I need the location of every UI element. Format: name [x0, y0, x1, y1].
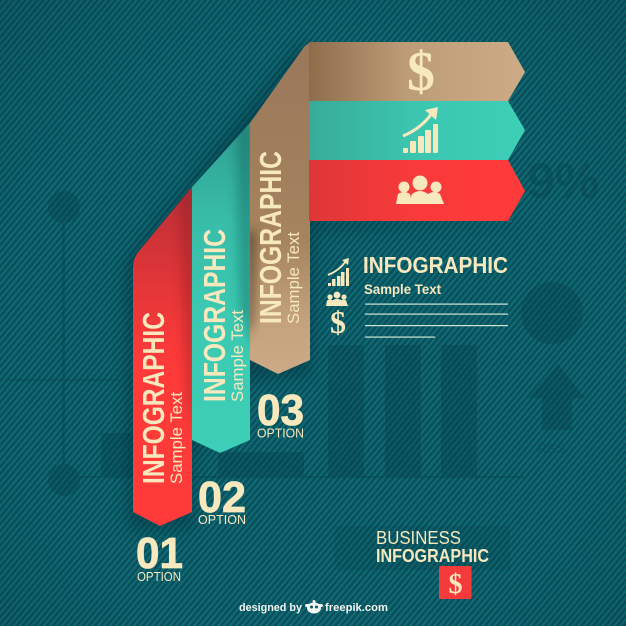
- text block: infographic heading: INFOGRAPHIC: [363, 252, 508, 278]
- panel: teal band with growth chart: [309, 101, 525, 160]
- icon: small people: [326, 292, 348, 306]
- ghost shadow behind business title: [335, 526, 510, 570]
- icon: small growth chart: [328, 258, 349, 286]
- teal ribbon sample text: Sample Text: [229, 310, 247, 402]
- teal ribbon heading: INFOGRAPHIC: [197, 229, 232, 402]
- text block: business infographic title: INFOGRAPHIC: [376, 546, 489, 566]
- red ribbon heading: INFOGRAPHIC: [136, 312, 171, 484]
- panel: teal ribbon vertical: [192, 123, 254, 453]
- red ribbon sample text: Sample Text: [168, 392, 186, 484]
- text lines: [365, 304, 508, 338]
- brown ribbon heading: INFOGRAPHIC: [253, 151, 288, 324]
- option 03: OPTION: [257, 426, 304, 440]
- icon: dollar: $: [407, 41, 435, 103]
- icon: small dollar: $: [330, 304, 346, 340]
- panel: brown band with dollar: [309, 41, 525, 103]
- option 01: 01: [136, 529, 183, 578]
- ghost background chart: RSS: [537, 440, 566, 456]
- footer credit: designed by: [239, 602, 303, 614]
- ribbon shadows: [125, 38, 525, 530]
- icon: growth chart: [403, 107, 438, 153]
- icon: freepik logo: [305, 600, 323, 614]
- panel: red ribbon vertical: [133, 187, 196, 526]
- text block: business infographic title: BUSINESS: [376, 528, 461, 548]
- icon: people: [396, 176, 444, 204]
- panel: red band with people: [309, 160, 525, 221]
- icon: red dollar square: $: [448, 569, 462, 600]
- ghost background chart: [8, 153, 599, 496]
- option 03: 03: [257, 386, 304, 435]
- text block: business infographic title: [376, 528, 489, 566]
- icon: red dollar square: [439, 566, 472, 600]
- text block: sample text: Sample Text: [364, 281, 441, 297]
- panel: brown ribbon vertical: [250, 43, 310, 374]
- option 01: OPTION: [137, 569, 181, 584]
- ghost background chart: 9%: [527, 153, 599, 209]
- footer credit: [239, 600, 388, 614]
- footer credit: freepik.com: [325, 602, 388, 614]
- option 02: OPTION: [198, 512, 246, 527]
- brown ribbon sample text: Sample Text: [285, 232, 303, 324]
- option 02: 02: [198, 473, 246, 522]
